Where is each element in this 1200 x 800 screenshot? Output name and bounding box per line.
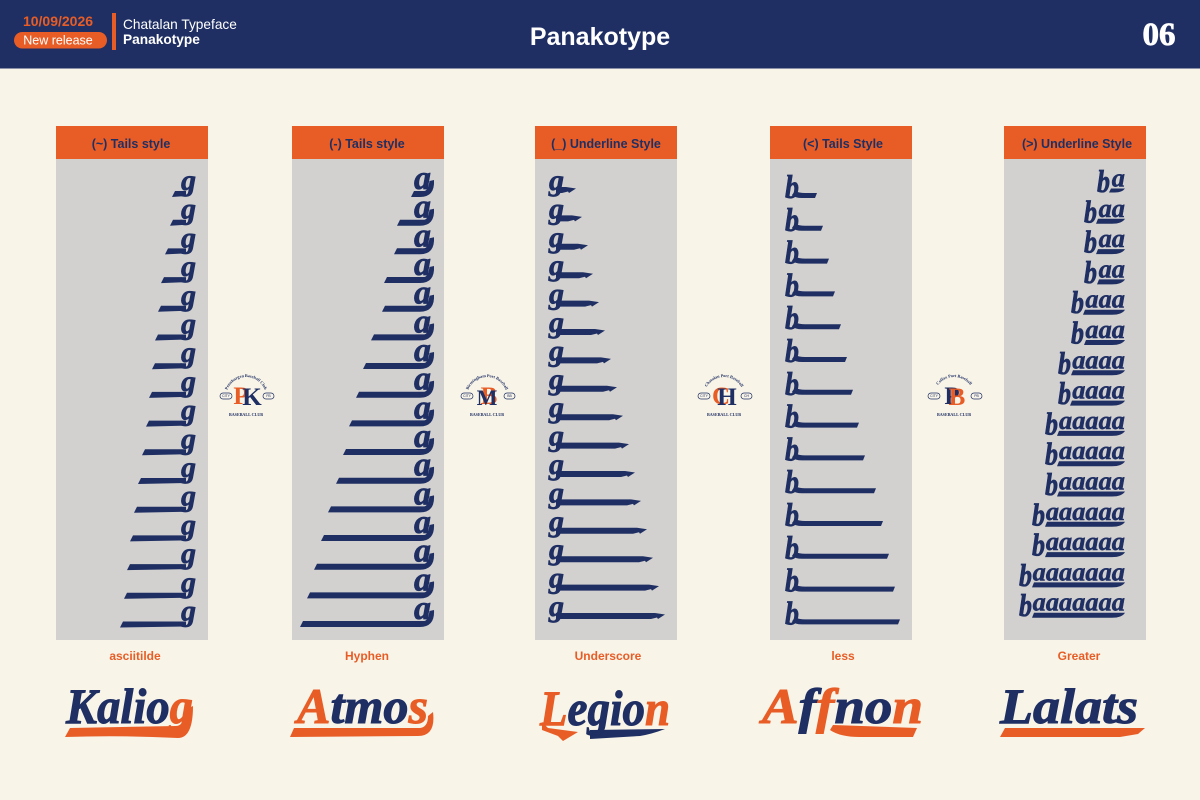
new release pill: New release	[23, 34, 93, 48]
glyph rows: b	[785, 596, 799, 632]
panel heading	[56, 126, 208, 159]
glyph rows: a	[414, 590, 431, 627]
glyph rows: a	[414, 533, 431, 570]
badge: PB baseball club: P	[944, 383, 960, 410]
panel: less tails	[770, 126, 912, 640]
badge: PB baseball club: CITY	[930, 394, 939, 398]
badge: PB baseball club: PB	[974, 394, 979, 398]
label: hyphen: Hyphen	[345, 649, 389, 663]
glyph rows: aaaa	[1072, 375, 1125, 405]
badge: PB baseball club: B	[949, 384, 965, 411]
glyph rows: b	[1097, 163, 1110, 199]
new release pill	[14, 32, 107, 48]
glyph rows: a	[414, 217, 431, 254]
glyph rows: aa	[1099, 193, 1125, 223]
glyph rows	[300, 160, 434, 627]
glyph rows	[120, 164, 196, 628]
glyph rows	[1019, 162, 1125, 623]
panel heading	[1004, 126, 1146, 159]
panel: underscore underline	[535, 126, 677, 640]
badge: CH baseball club: CITY	[700, 394, 709, 398]
glyph rows: aaaaaaa	[1033, 556, 1125, 586]
glyph rows: b	[785, 236, 799, 272]
panel heading: (~) Tails style	[92, 137, 170, 151]
glyph rows: g	[548, 533, 564, 566]
glyph rows: a	[414, 447, 431, 484]
wordmark: Lalats: Lalats	[999, 678, 1138, 734]
glyph rows: b	[785, 498, 799, 534]
glyph rows: g	[180, 279, 196, 312]
glyph rows: aaaaaa	[1046, 526, 1125, 556]
label: underscore: Underscore	[575, 649, 642, 663]
glyph rows: a	[414, 418, 431, 455]
glyph rows: a	[414, 475, 431, 512]
glyph rows: a	[414, 160, 431, 197]
glyph rows: b	[1058, 345, 1071, 381]
badge: PK baseball club: CITY	[222, 394, 231, 398]
glyph rows: b	[785, 203, 799, 239]
glyph rows: aa	[1099, 223, 1125, 253]
glyph rows: a	[414, 275, 431, 312]
glyph rows: g	[180, 480, 196, 513]
badge: PK baseball club: BASEBALL CLUB	[229, 412, 263, 417]
panel heading	[535, 126, 677, 159]
glyph rows: b	[785, 432, 799, 468]
badge: PK baseball club: FB	[266, 394, 271, 398]
badge: PB baseball club: Colfax Port Baseball	[936, 374, 972, 385]
badge: CH baseball club: Chatalan Port Baseball	[705, 374, 744, 387]
glyph rows: b	[1084, 254, 1097, 290]
glyph rows: g	[548, 590, 564, 623]
glyph rows: aaaa	[1072, 344, 1125, 374]
glyph rows: b	[1045, 466, 1058, 502]
glyph rows: b	[785, 531, 799, 567]
wordmark: Kaliog: Kaliog	[65, 678, 193, 734]
glyph rows: g	[548, 164, 564, 197]
glyph rows: g	[548, 420, 564, 453]
glyph rows: b	[785, 170, 799, 206]
glyph rows: g	[180, 508, 196, 541]
badge: CH baseball club: C	[712, 383, 730, 410]
badge: MB baseball club: B	[481, 383, 497, 410]
glyph rows: g	[180, 394, 196, 427]
panel heading	[770, 126, 912, 159]
glyph rows: aaaaaa	[1046, 496, 1125, 526]
badge: PK baseball club: Pennhurgen Baseball Club	[224, 374, 267, 390]
header bar	[0, 0, 1200, 68]
glyph rows: g	[180, 164, 196, 197]
badge: PK baseball club	[220, 374, 274, 417]
release date: 10/09/2026	[23, 13, 93, 29]
wordmark: Affnon: Affnon	[759, 678, 923, 734]
panel heading: (<) Tails Style	[803, 137, 883, 151]
glyph rows: b	[1045, 436, 1058, 472]
glyph rows: g	[548, 306, 564, 339]
glyph rows: g	[180, 594, 196, 628]
glyph rows: g	[180, 537, 196, 570]
glyph rows: b	[785, 367, 799, 403]
glyph rows: g	[180, 422, 196, 455]
badge: PB baseball club: BASEBALL CLUB	[937, 412, 971, 417]
glyph rows	[548, 164, 665, 623]
glyph rows: g	[180, 308, 196, 340]
glyph rows: g	[548, 562, 564, 595]
glyph rows: b	[1045, 405, 1058, 441]
glyph rows: g	[180, 451, 196, 484]
badge: MB baseball club	[460, 374, 516, 417]
glyph rows: b	[1071, 284, 1084, 320]
badge: MB baseball club: CITY	[463, 394, 472, 398]
glyph rows: b	[1032, 527, 1045, 563]
glyph rows: b	[785, 268, 799, 304]
badge: CH baseball club: BASEBALL CLUB	[707, 412, 741, 417]
glyph rows: a	[414, 189, 431, 226]
glyph rows: b	[1032, 496, 1045, 532]
glyph rows: g	[548, 249, 564, 282]
panel: greater underline	[1004, 126, 1146, 640]
panel: asciitilde tails	[56, 126, 208, 640]
label: greater: Greater	[1058, 649, 1101, 663]
glyph rows: g	[180, 250, 196, 283]
title: Panakotype	[530, 23, 670, 51]
glyph rows: b	[785, 400, 799, 436]
glyph rows: g	[180, 193, 196, 226]
label: less: less	[831, 649, 855, 663]
glyph rows: b	[785, 334, 799, 370]
glyph rows: a	[414, 246, 431, 283]
glyph rows: g	[548, 363, 564, 396]
glyph rows: a	[414, 561, 431, 598]
glyph rows: g	[548, 334, 564, 367]
glyph rows: b	[1071, 314, 1084, 350]
badge: PK baseball club: P	[233, 383, 249, 410]
panel heading: (>) Underline Style	[1022, 137, 1132, 151]
wordmark: Atmos: Atmos	[294, 678, 428, 734]
badge: MB baseball club: M	[477, 385, 498, 410]
glyph rows: g	[548, 221, 564, 254]
glyph rows: a	[414, 504, 431, 541]
glyph rows: b	[785, 564, 799, 600]
panel: hyphen tails	[292, 126, 444, 640]
orange divider	[112, 13, 116, 50]
glyph rows: g	[548, 278, 564, 311]
glyph rows: b	[785, 465, 799, 501]
glyph rows: aaa	[1085, 284, 1125, 314]
glyph rows: b	[1084, 224, 1097, 260]
wordmark: Legion: Legion	[539, 680, 670, 736]
glyph rows: aaaaa	[1059, 466, 1125, 496]
panel heading: (-) Tails style	[329, 137, 405, 151]
panel heading	[292, 126, 444, 159]
glyph rows: b	[1084, 193, 1097, 229]
badge: PB baseball club	[928, 374, 982, 417]
glyph rows: a	[414, 332, 431, 369]
glyph rows: g	[548, 476, 564, 509]
glyph rows: g	[548, 391, 564, 424]
badge: CH baseball club: H	[717, 384, 737, 411]
glyph rows: g	[548, 448, 564, 481]
badge: MB baseball club: BASEBALL CLUB	[470, 412, 504, 417]
badge: CH baseball club: CH	[744, 394, 749, 398]
glyph rows: aa	[1099, 253, 1125, 283]
badge: PK baseball club: K	[242, 384, 262, 411]
glyph rows: aaaaaaa	[1033, 587, 1125, 617]
typeface name	[123, 17, 237, 47]
glyph rows: g	[548, 505, 564, 538]
glyph rows: a	[414, 361, 431, 398]
glyph rows: g	[180, 221, 196, 254]
typeface name: Panakotype	[123, 32, 200, 47]
glyph rows: g	[548, 192, 564, 225]
glyph rows: aaaaa	[1059, 405, 1125, 435]
badge: MB baseball club: Birmingham Port Baseball	[466, 374, 508, 390]
glyph rows: g	[180, 566, 196, 599]
glyph rows: a	[414, 303, 431, 340]
glyph rows	[785, 170, 900, 632]
glyph rows: a	[414, 389, 431, 426]
label: asciitilde: asciitilde	[109, 649, 161, 663]
glyph rows: a	[1112, 162, 1125, 192]
typeface name: Chatalan Typeface	[123, 17, 237, 32]
glyph rows: b	[785, 301, 799, 337]
glyph rows: g	[180, 365, 196, 398]
page number: 06	[1142, 17, 1176, 53]
glyph rows: g	[180, 336, 196, 369]
glyph rows: aaa	[1085, 314, 1125, 344]
glyph rows: b	[1019, 557, 1032, 593]
glyph rows: aaaaa	[1059, 435, 1125, 465]
panel heading: (_) Underline Style	[551, 137, 661, 151]
glyph rows: b	[1058, 375, 1071, 411]
badge: CH baseball club	[698, 374, 752, 417]
glyph rows: b	[1019, 587, 1032, 623]
badge: MB baseball club: BB	[507, 394, 512, 398]
